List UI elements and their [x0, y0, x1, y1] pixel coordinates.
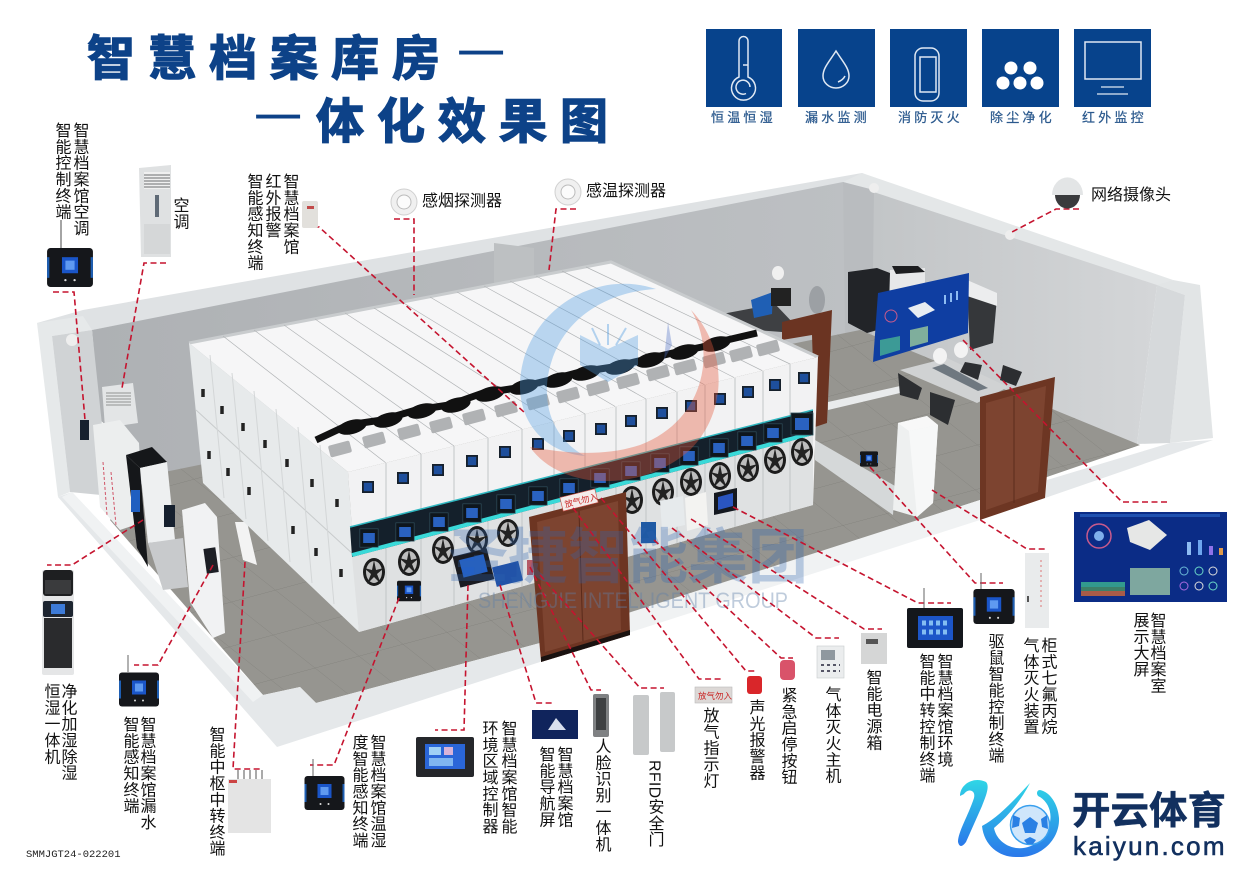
logo mark	[958, 780, 1059, 857]
label: 声光报警器: 声光报警器	[746, 699, 766, 780]
floor air conditioner	[182, 503, 225, 638]
title: 一	[254, 93, 302, 146]
label: 智慧档案馆漏水智能感知终端: 智慧档案馆漏水	[138, 716, 156, 830]
label: 智慧档案馆温湿度智能感知终端	[350, 734, 386, 848]
watermark text: 圣捷智能集团	[448, 524, 808, 591]
blue nav panel	[492, 561, 523, 587]
label: 净化加湿除湿恒湿一体机: 净化加湿除湿	[58, 683, 78, 781]
watermark logo	[520, 284, 719, 481]
device: navigation screen	[532, 710, 578, 739]
label: 智慧档案室展示大屏	[1130, 612, 1166, 694]
icon: 漏水监测	[798, 29, 875, 125]
white cabinets	[93, 420, 143, 530]
shelf front	[348, 357, 818, 632]
meeting table	[898, 358, 1022, 425]
hub tablet	[714, 488, 737, 515]
kaiyun logo	[958, 780, 1228, 861]
label: 网络摄像头: 网络摄像头	[1091, 185, 1171, 204]
device: gas cabinet	[1025, 553, 1049, 628]
label: 放气指示灯: 放气指示灯	[700, 707, 720, 789]
handwheels	[363, 438, 813, 586]
label: 智慧档案馆空调智能控制终端: 智慧档案馆空调	[70, 122, 90, 237]
humidity unit base	[148, 538, 188, 590]
back door	[782, 310, 832, 427]
logo name: 开云体育	[1072, 790, 1226, 833]
icon: 恒温恒湿	[706, 29, 782, 125]
label: 智慧档案馆漏水智能感知终端	[120, 716, 156, 830]
device: alarm	[747, 676, 762, 694]
env terminal	[397, 581, 421, 601]
label: 智慧档案馆红外报警智能感知终端	[244, 173, 300, 271]
title: 一	[457, 29, 505, 82]
air conditioner in room	[102, 383, 138, 428]
room: walls and floor	[37, 173, 1213, 747]
device: infrared sensor	[302, 201, 318, 228]
label: 智慧档案馆空调智能控制终端	[52, 122, 90, 237]
wall terminal	[860, 451, 878, 467]
device: hub transfer box	[228, 770, 271, 833]
label: 智慧档案馆智能环境区域控制器: 智慧档案馆智能	[498, 720, 518, 835]
back right wall	[843, 173, 1173, 287]
right door	[980, 377, 1055, 520]
label: 人脸识别一体机: 人脸识别一体机	[592, 738, 612, 853]
label: 智慧档案馆环境智能中转控制终端	[916, 653, 954, 783]
desk with laptop	[722, 286, 825, 332]
label: 智慧档案馆温湿度智能感知终端: 度智能感知终端	[350, 734, 368, 848]
watermark text: SHENGJIE INTELLIGENT GROUP	[478, 588, 788, 613]
left wall end	[37, 316, 92, 497]
wall-mounted panels on shelves	[397, 488, 737, 601]
device: rodent terminal	[973, 573, 1015, 624]
title: 智慧档案库房	[87, 33, 453, 86]
low partition walls	[828, 386, 900, 410]
teal display band	[350, 410, 813, 557]
device: hub terminal	[907, 588, 963, 648]
label: 智慧档案馆智能导航屏: 智慧档案馆	[554, 746, 574, 828]
black cabinet	[126, 447, 175, 567]
label: 智能中枢中转终端: 智能中枢中转终端	[206, 726, 226, 856]
label: 柜式七氟丙烷气体灭火装置: 柜式七氟丙烷	[1038, 637, 1058, 736]
device: leak terminal	[119, 655, 159, 706]
server racks	[848, 266, 997, 350]
device: exhaust sign: 放气勿入	[698, 691, 733, 701]
upper screens	[362, 372, 810, 493]
title: 体化效果图	[316, 96, 621, 149]
left equipment row	[80, 383, 257, 638]
label: 紧急启停按钮: 紧急启停按钮	[778, 687, 798, 785]
icon: 消防灭火	[890, 29, 967, 125]
wall pillar	[494, 243, 534, 298]
gas cabinet	[893, 416, 938, 517]
label: 智慧档案馆红外报警智能感知终端: 红外报警	[262, 173, 282, 238]
labels	[42, 122, 1171, 856]
label: 智慧档案馆环境智能中转控制终端: 智能中转控制终端	[916, 653, 936, 783]
label: 净化加湿除湿恒湿一体机	[42, 683, 78, 781]
label: 智慧档案馆智能环境区域控制器	[480, 720, 518, 835]
label: 智慧档案室展示大屏: 智慧档案室	[1148, 612, 1166, 694]
label: 智慧档案馆红外报警智能感知终端: 智能感知终端	[244, 173, 264, 271]
title	[87, 29, 621, 149]
device: emergency button	[780, 660, 795, 680]
office room furniture	[722, 266, 1055, 520]
device: temperature terminal	[304, 759, 344, 810]
device: gas host	[817, 646, 844, 678]
icon: 恒温恒湿: 恒温恒湿	[711, 110, 776, 125]
device: exhaust sign	[695, 687, 733, 703]
device: face terminal	[593, 694, 609, 737]
black cable chain	[316, 333, 757, 440]
label: 智慧档案馆空调智能控制终端: 智能控制终端	[52, 122, 72, 220]
logo url: kaiyun.com	[1073, 831, 1228, 861]
label: 柜式七氟丙烷气体灭火装置: 气体灭火装置	[1020, 637, 1040, 735]
label: 气体灭火主机: 气体灭火主机	[822, 686, 842, 785]
top trays	[328, 339, 780, 458]
label: RFID安全门: RFID安全门	[646, 760, 664, 848]
front door	[529, 492, 630, 662]
icon row	[706, 29, 1151, 125]
ceiling cameras	[66, 183, 1015, 512]
face panel	[641, 522, 656, 543]
device: purifier unit	[42, 570, 74, 675]
device: heat detector	[555, 179, 581, 205]
label: 智能电源箱: 智能电源箱	[864, 669, 882, 750]
icon: 漏水监测: 漏水监测	[805, 110, 870, 125]
band screens	[360, 413, 813, 547]
shelf left side	[189, 343, 359, 632]
label: 净化加湿除湿恒湿一体机: 恒湿一体机	[42, 683, 60, 765]
device: area controller	[416, 737, 474, 777]
shelf top	[189, 262, 818, 472]
sensor strip	[527, 560, 533, 575]
label: 智慧档案馆红外报警智能感知终端: 智慧档案馆	[280, 173, 300, 254]
device: smoke detector	[391, 189, 417, 215]
back left wall	[37, 173, 880, 330]
device: air conditioner	[139, 165, 171, 257]
label: 感温探测器: 感温探测器	[586, 182, 666, 200]
icon: 红外监控: 红外监控	[1082, 110, 1147, 125]
right end pillar	[1157, 280, 1213, 443]
compact shelving block	[189, 262, 818, 632]
label: 驱鼠智能控制终端: 驱鼠智能控制终端	[986, 633, 1004, 763]
device: network camera	[1052, 177, 1083, 209]
tablet controller	[453, 548, 494, 588]
device: big display	[1074, 512, 1227, 602]
red dashed leader lines	[47, 209, 1170, 769]
front wall	[58, 492, 540, 747]
display screen	[873, 273, 969, 362]
icon: 红外监控	[1074, 29, 1151, 125]
device: RFID gates	[633, 692, 675, 755]
label: 柜式七氟丙烷气体灭火装置	[1020, 637, 1058, 736]
label: 智慧档案馆漏水智能感知终端: 智能感知终端	[120, 716, 140, 814]
label: 智慧档案馆智能导航屏	[536, 746, 574, 828]
floor	[110, 330, 1140, 703]
label: 智慧档案馆环境智能中转控制终端: 智慧档案馆环境	[934, 653, 954, 768]
icon: 消防灭火: 消防灭火	[898, 110, 963, 125]
gas host panel	[660, 496, 685, 530]
label: 感烟探测器: 感烟探测器	[422, 192, 502, 210]
label: 智慧档案馆智能环境区域控制器: 环境区域控制器	[480, 720, 498, 834]
label: 空调: 空调	[170, 197, 190, 230]
icon: 除尘净化: 除尘净化	[990, 110, 1055, 125]
model code: SMMJGT24-022201	[26, 849, 121, 861]
power box panel	[685, 492, 708, 531]
sign: 放气勿入: 放气勿入	[563, 491, 599, 509]
icon: 除尘净化	[982, 29, 1059, 125]
wall terminals	[80, 420, 89, 440]
device: power box	[861, 633, 887, 664]
small hub box	[235, 522, 257, 565]
label: 智慧档案馆温湿度智能感知终端: 智慧档案馆温湿	[368, 734, 386, 848]
label: 智慧档案馆智能导航屏: 智能导航屏	[536, 746, 556, 828]
label: 智慧档案室展示大屏: 展示大屏	[1130, 612, 1150, 677]
device: air-conditioner terminal	[47, 220, 93, 287]
